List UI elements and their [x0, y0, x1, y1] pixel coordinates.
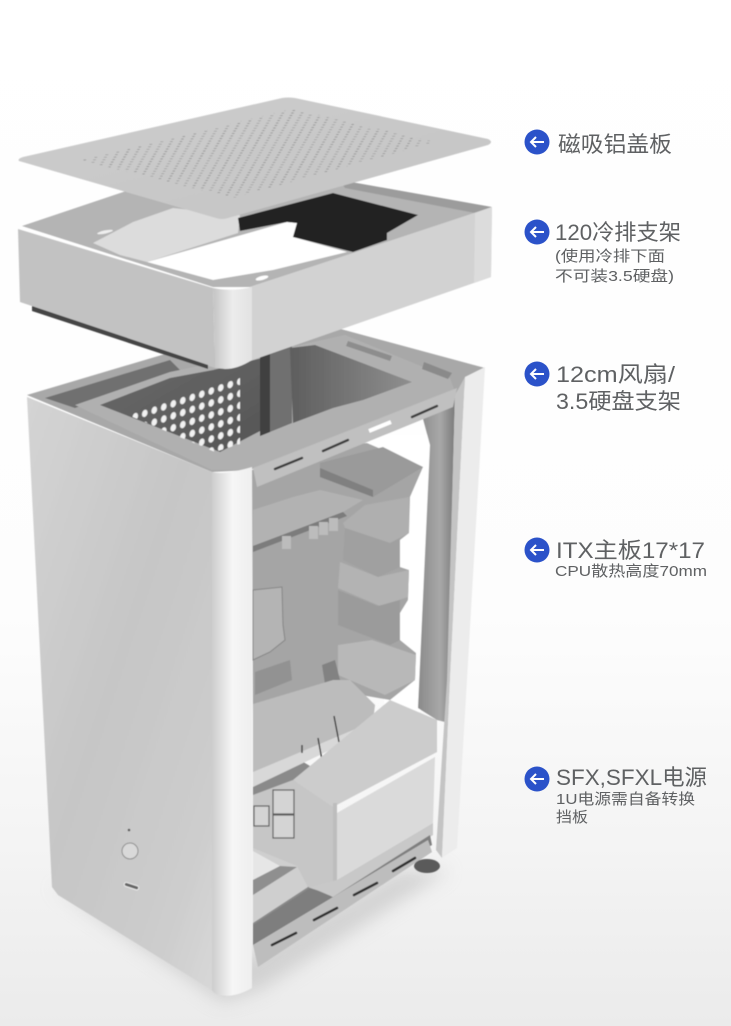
front corner	[212, 467, 252, 996]
power button	[122, 843, 138, 859]
dark foam	[238, 193, 418, 252]
PSU front face	[337, 757, 435, 880]
callout: 120 radiator bracket: (使用冷排下面	[555, 248, 665, 265]
right post strip	[436, 377, 465, 858]
top rail	[253, 388, 457, 487]
heatsink band	[253, 490, 363, 546]
top frame	[18, 178, 492, 369]
bottom rail	[253, 840, 432, 967]
graphics/cable bundle	[253, 680, 375, 783]
callout: fan bracket: 3.5硬盘支架	[556, 389, 681, 414]
heatsink shadow	[253, 512, 347, 552]
right post inner band	[418, 395, 455, 722]
callout: power supply: 1U电源需自备转换	[556, 791, 695, 808]
slot holes	[97, 229, 113, 235]
callout: power supply: 挡板	[556, 808, 588, 826]
callout: power supply	[524, 765, 707, 826]
frame right face	[250, 207, 492, 361]
foot	[414, 859, 440, 873]
lid plate	[18, 98, 491, 219]
case body	[27, 328, 485, 998]
frame underside strip	[32, 306, 208, 369]
inner wall left	[100, 358, 262, 452]
magnetic lid	[18, 98, 491, 219]
callout: motherboard	[524, 538, 707, 580]
connector block lower	[338, 640, 416, 695]
frame left face	[18, 229, 215, 368]
callout: 120 radiator bracket: 不可装3.5硬盘)	[555, 267, 674, 285]
PSU top face	[293, 700, 437, 807]
top rim	[27, 328, 485, 472]
motherboard	[252, 443, 423, 720]
led	[128, 829, 130, 831]
rear top bracket tabs	[346, 341, 392, 361]
capacitors	[282, 518, 338, 549]
right post outer	[442, 367, 485, 858]
callout: power supply: SFX,SFXL电源	[556, 765, 707, 790]
callout: motherboard: ITX主板17*17	[556, 538, 705, 563]
PSU rear plate	[253, 780, 333, 895]
callout: 120 radiator bracket	[524, 220, 681, 285]
see-through window	[360, 435, 432, 712]
callout: fan bracket	[524, 362, 681, 414]
case floor	[253, 835, 432, 945]
radiator opening	[147, 222, 347, 280]
frame rail shading	[340, 180, 492, 213]
CPU socket	[253, 587, 285, 660]
callout: 120 radiator bracket: 120冷排支架	[555, 220, 681, 245]
frame inner back wall	[22, 178, 480, 287]
white pale panel	[93, 208, 240, 262]
connector block mid	[338, 562, 409, 606]
inner wall right	[290, 345, 412, 423]
callout: lid	[524, 130, 672, 157]
flange	[75, 335, 455, 470]
connector block upper	[343, 497, 409, 543]
lid perforation	[84, 110, 430, 198]
backplate behind lower cables	[253, 760, 333, 945]
SSD tray	[253, 848, 308, 923]
product: exploded computer case	[18, 98, 492, 998]
callout: lid: 磁吸铝盖板	[558, 132, 672, 157]
callout: motherboard: CPU散热高度70mm	[555, 563, 707, 580]
small chips	[255, 660, 292, 695]
power connectors	[254, 790, 294, 838]
inner post	[260, 346, 292, 436]
floor shadow	[50, 870, 450, 1002]
callout: fan bracket: 12cm风扇/	[556, 362, 676, 387]
USB-C port	[124, 882, 139, 890]
case left panel	[27, 397, 225, 998]
perforated wall dots	[132, 378, 241, 452]
frame corner	[213, 287, 252, 369]
memory block	[320, 447, 423, 497]
